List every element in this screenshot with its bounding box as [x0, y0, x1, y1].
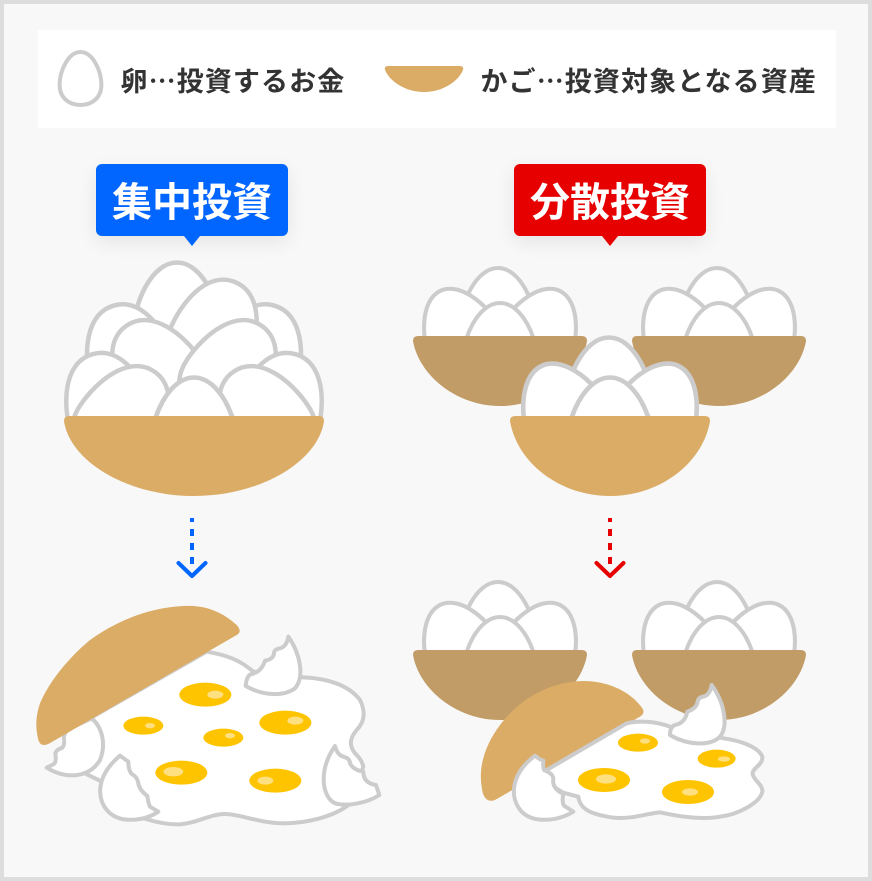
shell piece right: [324, 746, 379, 805]
overturned basket: [36, 606, 240, 745]
icon: legend basket: [385, 66, 463, 92]
illustration: lower-right intact basket: [624, 582, 814, 720]
shell piece bottom: [100, 756, 158, 820]
arrow: blue down: [178, 518, 206, 576]
egg splat: [547, 722, 762, 818]
yolks: [578, 734, 736, 804]
overturned basket: [481, 681, 644, 801]
label: concentrated investment: 集中投資: [112, 181, 272, 225]
illustration: back-left basket: [405, 268, 595, 406]
shell piece right: [670, 685, 725, 743]
label: diversified investment: 分散投資: [530, 181, 690, 225]
shell piece left: [47, 718, 103, 775]
icon: legend egg: [60, 52, 101, 105]
shell piece top right: [246, 637, 300, 694]
legend text: basket: かご…投資対象となる資産: [480, 60, 817, 99]
egg splat left: [87, 652, 364, 824]
illustration: one basket dropped: [481, 681, 762, 820]
legend text: egg: 卵…投資するお金: [120, 60, 345, 99]
arrow: red down: [596, 518, 624, 576]
illustration: many eggs in one basket: [52, 262, 336, 496]
shell piece left: [514, 756, 573, 820]
illustration: all eggs broken: [36, 606, 379, 824]
illustration: back-right basket: [624, 268, 814, 406]
panel: legend: [38, 30, 836, 128]
illustration: front basket: [502, 338, 718, 496]
illustration: lower-left intact basket: [405, 582, 595, 720]
label: concentrated investment: [96, 164, 288, 246]
yolks: [123, 683, 311, 793]
label: diversified investment: [514, 164, 706, 246]
